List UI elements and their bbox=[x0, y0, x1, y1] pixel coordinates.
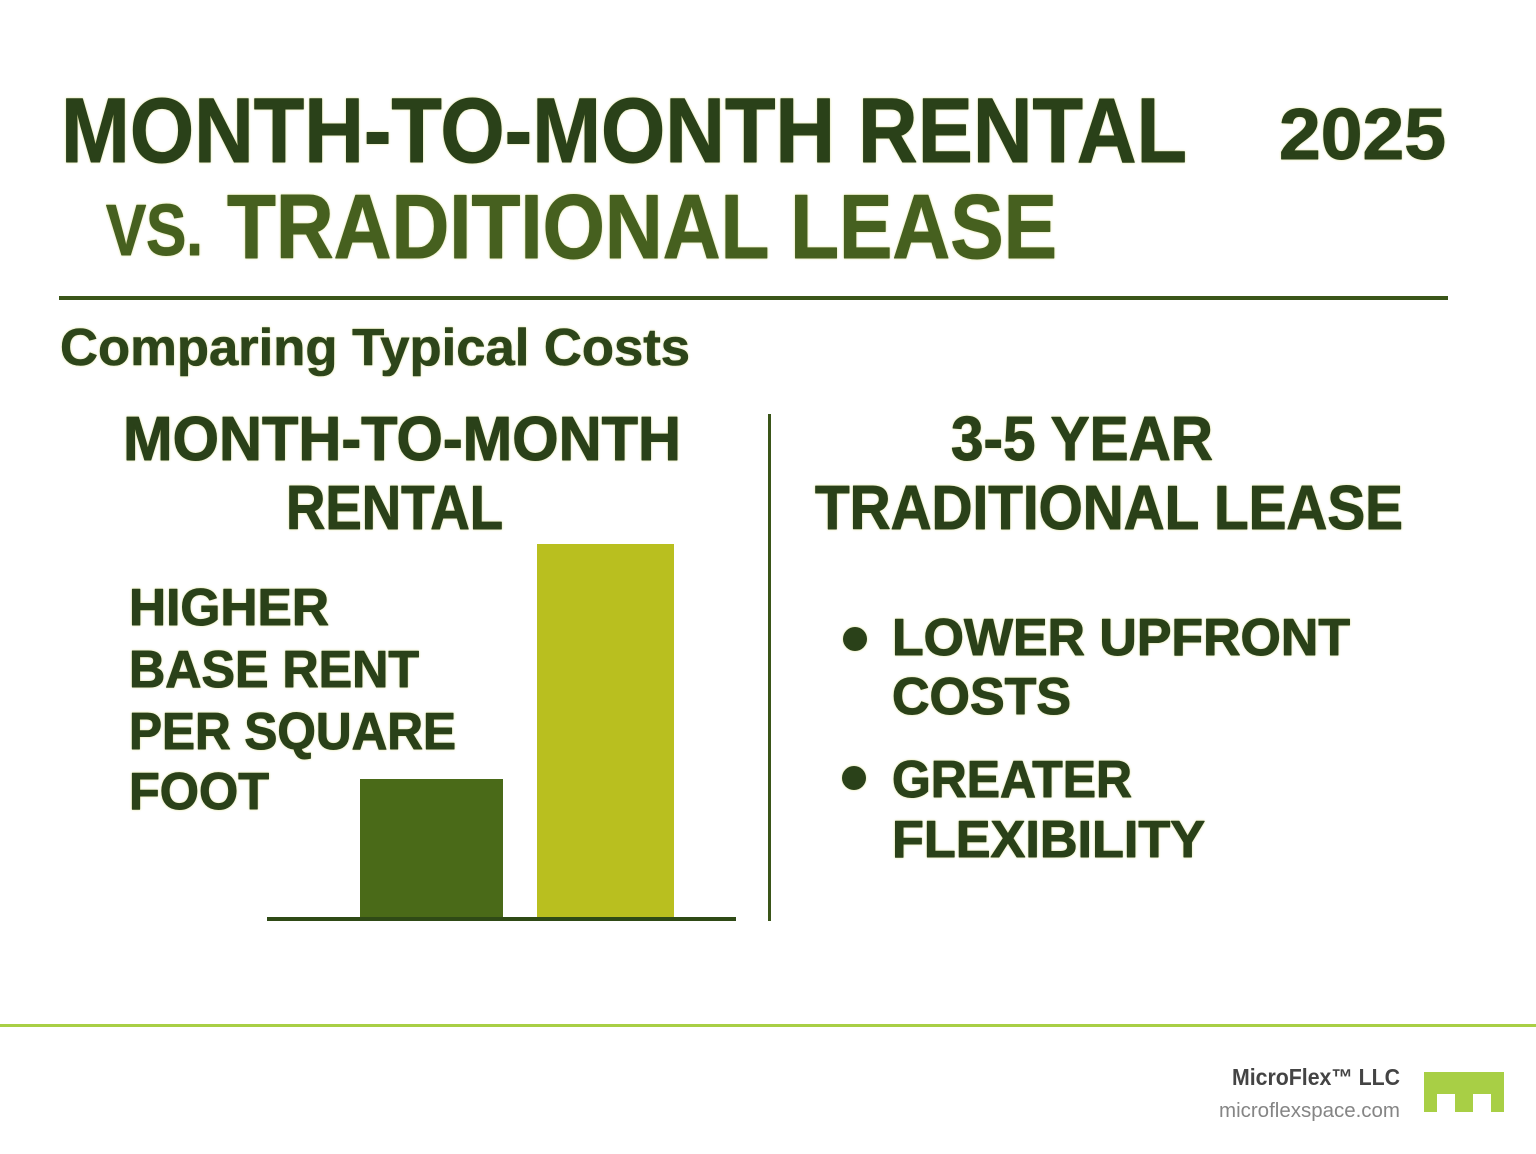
text block: higher base rent bbox=[129, 579, 456, 821]
bullet: greater flexibility bbox=[842, 751, 1205, 869]
year: 2025 bbox=[1279, 95, 1446, 175]
heading: month-to-month rental: RENTAL bbox=[286, 474, 503, 543]
bullet: greater flexibility: FLEXIBILITY bbox=[892, 811, 1205, 869]
chart axis bbox=[267, 917, 736, 921]
heading: month-to-month rental bbox=[123, 405, 681, 543]
text block: higher base rent: FOOT bbox=[129, 763, 269, 821]
panel divider bbox=[768, 414, 771, 921]
text block: higher base rent: HIGHER bbox=[129, 579, 329, 637]
heading: 3-5 year traditional lease: TRADITIONAL LEASE bbox=[815, 474, 1403, 543]
title line 1: MONTH-TO-MONTH RENTAL bbox=[61, 80, 1187, 182]
title rule bbox=[59, 296, 1448, 300]
bullet: lower upfront costs: COSTS bbox=[892, 668, 1071, 726]
bullet: greater flexibility: GREATER bbox=[892, 751, 1132, 809]
bar: lower cost bbox=[360, 779, 503, 918]
brand url: microflexspace.com bbox=[1219, 1100, 1400, 1122]
panel: traditional lease bbox=[815, 405, 1403, 869]
icon: microflex logo bbox=[1424, 1072, 1504, 1112]
bullet: lower upfront costs bbox=[843, 609, 1350, 726]
bar: higher cost bbox=[537, 544, 674, 917]
title line 2: traditional lease: TRADITIONAL LEASE bbox=[227, 177, 1057, 278]
bar chart bbox=[267, 544, 736, 921]
footer rule bbox=[0, 1024, 1536, 1027]
bullet: lower upfront costs: LOWER UPFRONT bbox=[892, 609, 1350, 667]
title line 2: vs.: VS. bbox=[106, 191, 203, 271]
subtitle: Comparing Typical Costs bbox=[60, 319, 690, 377]
text block: higher base rent: BASE RENT bbox=[129, 641, 419, 699]
title bbox=[61, 80, 1446, 278]
heading: 3-5 year traditional lease bbox=[815, 405, 1403, 543]
heading: 3-5 year traditional lease: 3-5 YEAR bbox=[951, 405, 1213, 474]
panel: month-to-month rental bbox=[123, 405, 736, 921]
heading: month-to-month rental: MONTH-TO-MONTH bbox=[123, 405, 681, 474]
brand name: MicroFlex™ LLC bbox=[1232, 1064, 1400, 1090]
footer brand bbox=[1219, 1064, 1504, 1122]
text block: higher base rent: PER SQUARE bbox=[129, 703, 456, 761]
